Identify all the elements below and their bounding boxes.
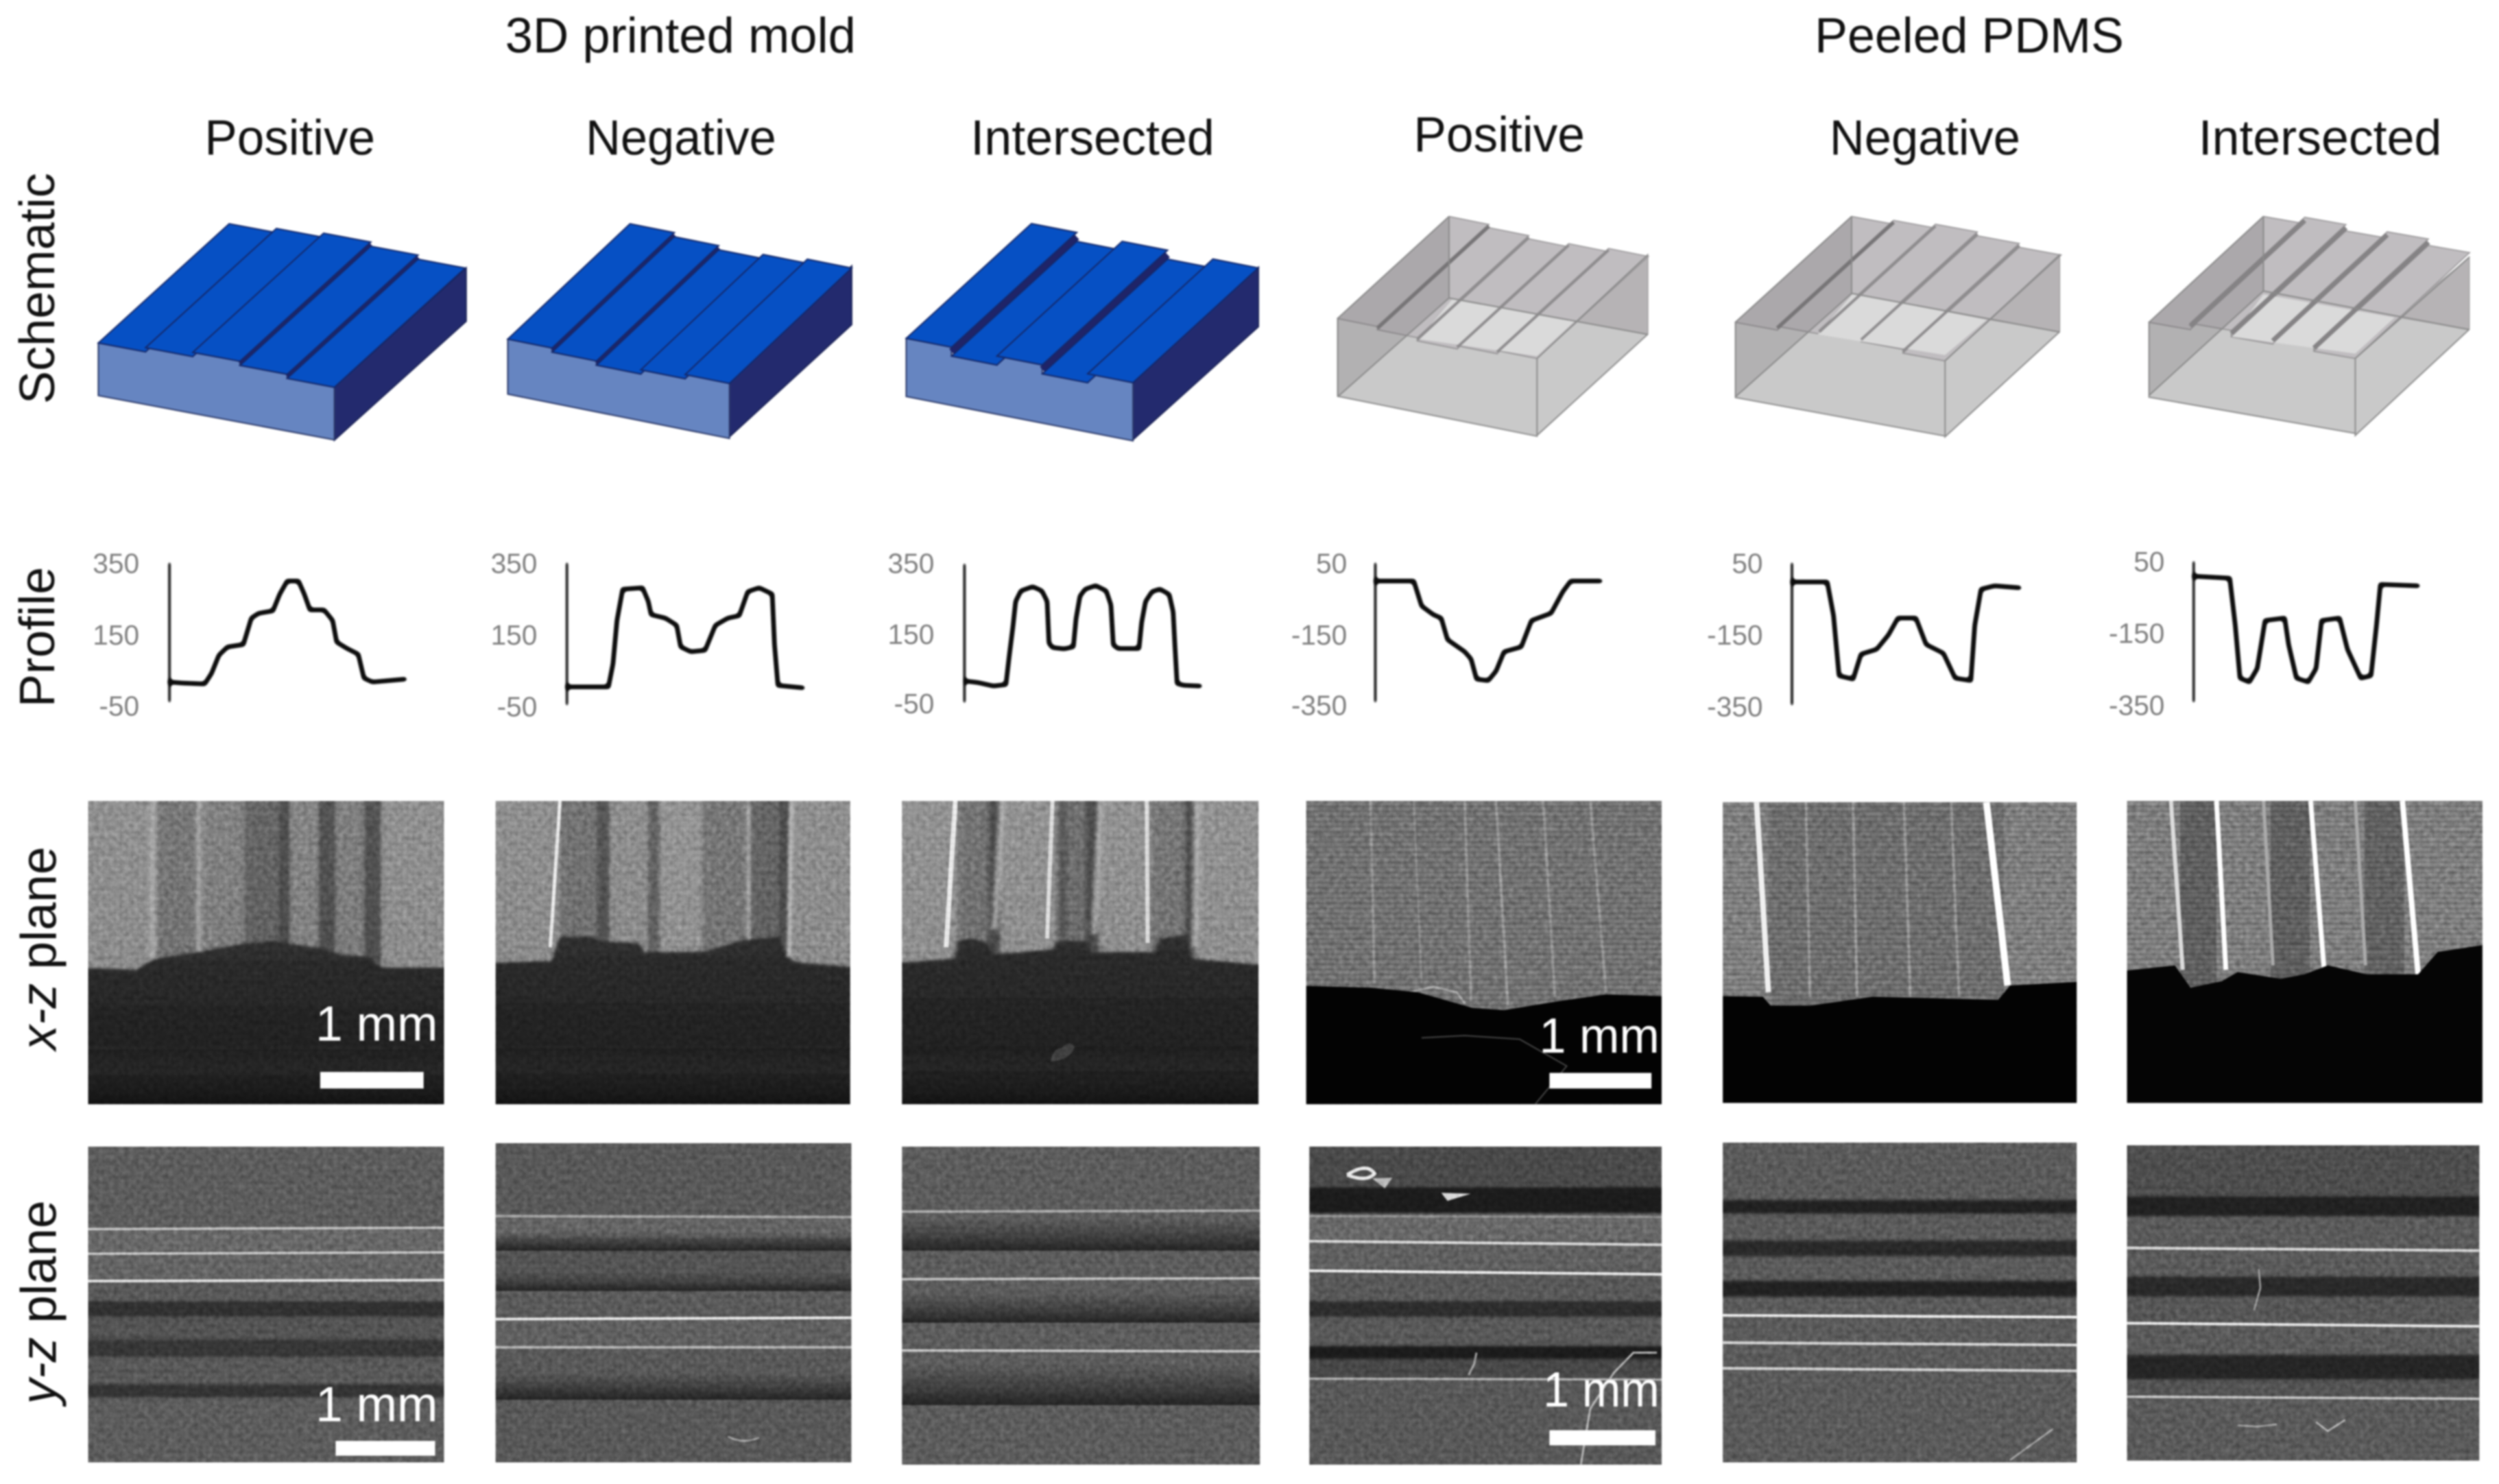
profile chart: mold positive: -50	[99, 690, 139, 721]
heading: Peeled PDMS: Peeled PDMS	[1815, 9, 2124, 64]
schematic: mold intersected	[906, 224, 1258, 441]
SEM y-z plane: mold positive with scale bar: 1 mm	[315, 1378, 438, 1433]
profile chart: mold intersected: -50	[894, 688, 934, 719]
SEM y-z plane: mold positive with scale bar	[77, 1138, 457, 1474]
SEM y-z plane: PDMS positive with scale bar: 1 mm	[1543, 1363, 1660, 1417]
schematic: PDMS positive	[1338, 217, 1649, 436]
row label: Schematic: Schematic	[10, 173, 65, 404]
profile chart: mold positive: 150	[93, 619, 139, 651]
SEM x-z plane: PDMS positive with scale bar	[1292, 791, 1677, 1113]
profile chart: mold positive	[93, 547, 405, 721]
profile chart: PDMS intersected: -350	[2109, 689, 2164, 721]
profile chart: mold intersected: 350	[887, 547, 934, 579]
schematic: PDMS intersected	[2149, 217, 2470, 435]
SEM x-z plane: PDMS positive with scale bar: 1 mm	[1539, 1009, 1660, 1064]
profile chart: mold negative: 350	[491, 547, 537, 579]
profile chart: PDMS positive: -350	[1291, 689, 1347, 721]
profile chart: mold negative: 150	[491, 619, 537, 651]
profile chart: mold negative	[491, 547, 803, 723]
profile chart: PDMS positive: -150	[1291, 619, 1347, 651]
profile chart: PDMS intersected: 50	[2133, 546, 2164, 577]
schematic: mold positive	[98, 224, 466, 440]
heading: 3D printed mold: 3D printed mold	[505, 9, 856, 64]
column heading: mold negative: Negative	[586, 110, 776, 165]
row label: x-z plane: x-z plane	[10, 847, 67, 1053]
profile chart: PDMS intersected	[2109, 546, 2418, 721]
schematic: mold negative	[507, 224, 852, 438]
SEM x-z plane: mold positive with scale bar: 1 mm	[315, 996, 438, 1051]
profile chart: PDMS negative: -150	[1707, 619, 1763, 651]
SEM y-z plane: mold intersected	[894, 1138, 1269, 1474]
SEM y-z plane: PDMS positive with scale bar	[1292, 1138, 1677, 1474]
SEM x-z plane: mold negative	[483, 791, 864, 1113]
profile chart: mold intersected: 150	[887, 619, 934, 650]
profile chart: PDMS intersected: -150	[2109, 618, 2164, 649]
column heading: PDMS intersected: Intersected	[2199, 110, 2441, 165]
row label: Profile: Profile	[10, 567, 65, 707]
profile chart: mold intersected	[887, 547, 1200, 719]
row label: y-z plane: y-z plane	[10, 1200, 67, 1407]
profile chart: mold positive: 350	[93, 547, 139, 579]
SEM y-z plane: PDMS intersected	[2112, 1136, 2496, 1472]
column heading: PDMS negative: Negative	[1830, 110, 2020, 165]
profile chart: mold negative: -50	[497, 691, 537, 723]
profile chart: PDMS negative: 50	[1732, 547, 1763, 579]
SEM x-z plane: PDMS negative	[1708, 791, 2092, 1113]
column heading: PDMS positive: Positive	[1413, 108, 1585, 163]
profile chart: PDMS negative: -350	[1707, 691, 1763, 723]
schematic: PDMS negative	[1736, 217, 2061, 437]
profile chart: PDMS negative	[1707, 547, 2020, 723]
SEM x-z plane: PDMS intersected	[2112, 791, 2496, 1113]
column heading: mold intersected: Intersected	[970, 110, 1215, 165]
SEM y-z plane: PDMS negative	[1708, 1135, 2092, 1472]
profile chart: PDMS positive	[1291, 547, 1601, 721]
column heading: mold positive: Positive	[204, 110, 375, 165]
SEM x-z plane: mold positive with scale bar	[77, 791, 457, 1113]
profile chart: PDMS positive: 50	[1316, 547, 1347, 579]
SEM x-z plane: mold intersected	[894, 791, 1266, 1113]
SEM y-z plane: mold negative	[483, 1136, 865, 1472]
